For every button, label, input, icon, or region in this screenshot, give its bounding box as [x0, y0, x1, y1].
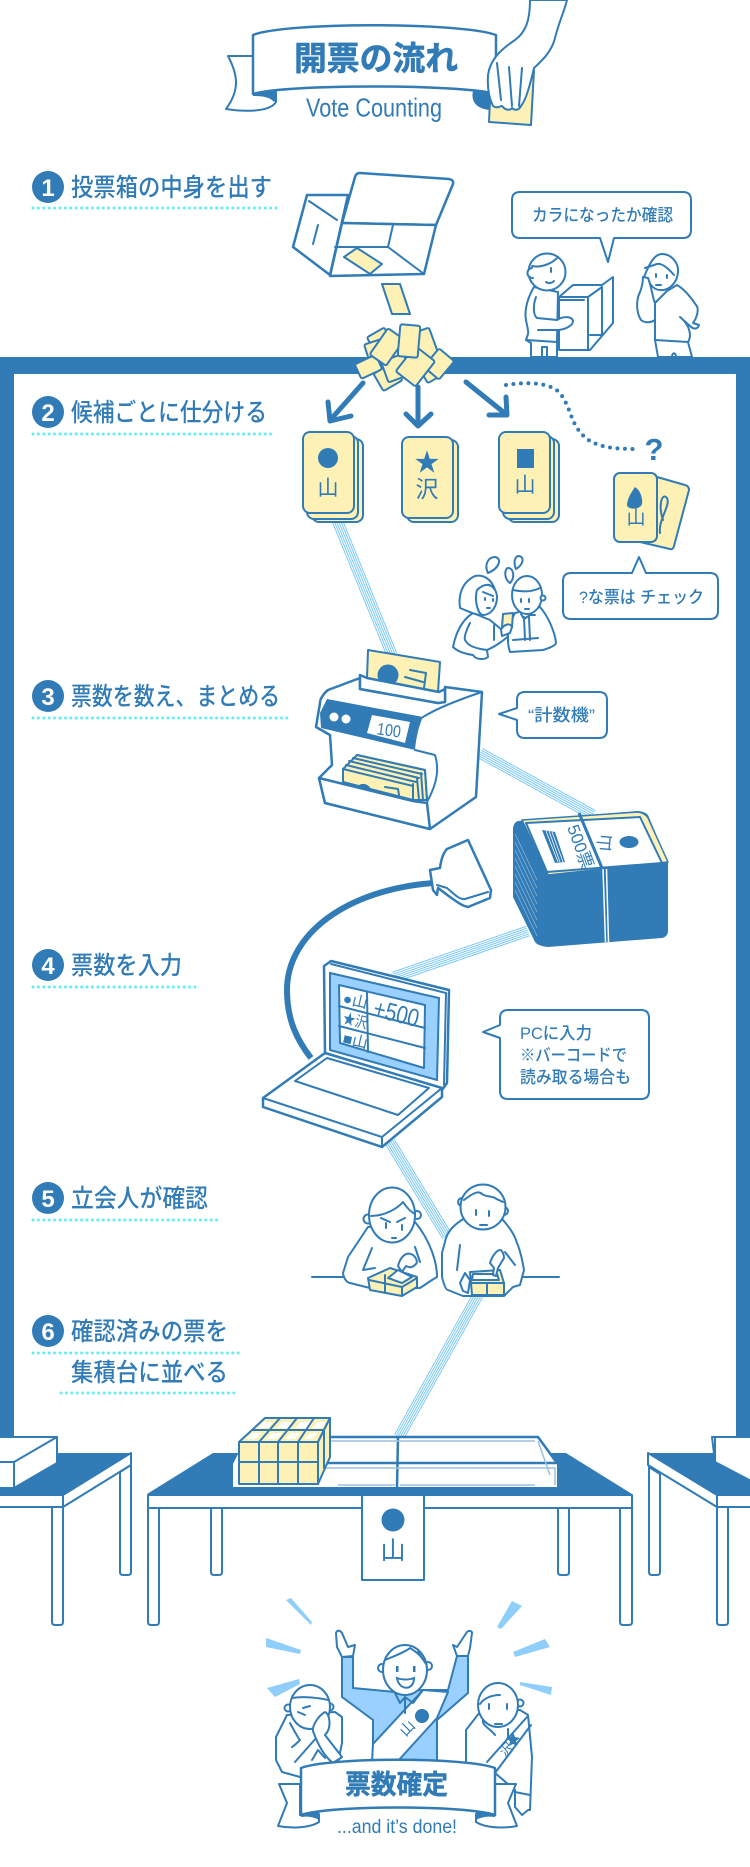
bubble: counting machine	[499, 692, 607, 738]
pile: circle candidate: 山	[318, 477, 338, 500]
tray front	[319, 778, 430, 829]
right witness	[442, 1218, 524, 1296]
counting machine	[316, 650, 482, 829]
step 5 heading	[32, 1182, 218, 1220]
laptop: ★沢	[341, 1010, 369, 1033]
ballot pile	[355, 324, 454, 391]
table legs	[148, 1508, 632, 1625]
step 1 heading: 1	[41, 175, 55, 202]
flow beams	[337, 520, 593, 1437]
winning candidate: 山	[396, 1717, 419, 1740]
step 1 heading	[32, 171, 280, 208]
heading text: 票数を数え、まとめる	[71, 683, 280, 711]
step 5 heading: 5	[41, 1186, 55, 1213]
barcode reader with cable	[287, 840, 491, 1058]
shirt with raised arms	[342, 1656, 468, 1762]
heading text line 1: 確認済みの票を	[71, 1318, 228, 1346]
counted ballots	[343, 755, 427, 800]
bubble: empty check	[512, 192, 691, 262]
bundle of 500 ballots	[513, 811, 668, 947]
doubtful ballots: 山	[626, 507, 646, 529]
number badge 3	[32, 680, 64, 712]
step 2 heading: 2	[41, 400, 55, 427]
banner fold shading	[301, 1812, 495, 1820]
ballot card in hand	[489, 70, 534, 125]
banner text: 票数確定	[345, 1770, 448, 1800]
pile: star candidate	[402, 437, 458, 522]
icon: opened ballot box	[293, 173, 453, 314]
bubble: check doubtful ballots: ?な票は チェック	[579, 588, 704, 607]
step 6 heading	[32, 1315, 239, 1393]
count label: 500票	[563, 822, 597, 871]
person thinking	[655, 285, 699, 357]
bundle left	[368, 1268, 417, 1296]
title banner	[226, 0, 567, 125]
step 3 heading	[32, 680, 287, 718]
pile: square candidate	[499, 432, 559, 522]
heading text: 候補ごとに仕分ける	[71, 399, 267, 427]
bundle of 500 ballots: 山	[595, 834, 615, 852]
people checking the box	[525, 254, 699, 357]
machine body	[316, 678, 482, 829]
banner tails	[278, 1784, 319, 1827]
barcode	[542, 830, 565, 863]
heading text: 立会人が確認	[71, 1185, 208, 1213]
pile: square candidate: 山	[514, 474, 536, 497]
keyboard base	[263, 1053, 442, 1147]
sash	[372, 1690, 448, 1762]
screen	[330, 973, 439, 1080]
left table	[0, 1437, 131, 1625]
bundle right	[470, 1270, 504, 1295]
ballot in hand	[502, 613, 513, 627]
pile: star candidate: ★	[414, 449, 440, 477]
winning candidate	[336, 1631, 472, 1762]
counter display	[367, 715, 410, 743]
pile: circle candidate	[303, 432, 363, 522]
candidate sign	[362, 1495, 424, 1580]
stack lines	[515, 834, 537, 936]
bubble: empty check: カラになったか確認	[532, 206, 673, 225]
falling ballot	[382, 284, 410, 314]
empty box held	[559, 277, 613, 350]
doubtful ballots	[614, 473, 689, 549]
banner left tail	[226, 56, 276, 111]
head	[378, 1664, 386, 1672]
sub text: ...and it’s done!	[337, 1817, 457, 1838]
paper band	[579, 813, 602, 868]
left witness	[343, 1222, 437, 1288]
number badge 1	[32, 171, 64, 203]
disappointed candidate right: 沢	[496, 1739, 516, 1759]
man	[508, 607, 556, 652]
top face	[522, 812, 668, 875]
ballot bundles on table	[239, 1418, 330, 1442]
dotted path to doubtful ballots	[506, 383, 638, 449]
heading text line 2: 集積台に並べる	[71, 1359, 228, 1387]
clear acrylic box	[233, 1437, 557, 1487]
subtitle: Vote Counting	[306, 93, 442, 123]
two people discussing	[453, 556, 556, 659]
main tally table	[147, 1418, 632, 1625]
collar	[395, 1690, 423, 1713]
result banner	[278, 1760, 517, 1838]
ballot in box	[344, 248, 382, 274]
hand	[488, 0, 567, 110]
hands	[336, 1631, 355, 1657]
bubble: enter into PC: ※バーコードで	[520, 1046, 627, 1065]
step 2 heading	[32, 396, 274, 434]
question mark: ?	[645, 432, 663, 467]
ballot being fed	[367, 650, 440, 692]
bubble: check doubtful ballots	[563, 557, 718, 619]
stack sides	[513, 811, 668, 947]
heading text: 投票箱の中身を出す	[71, 174, 272, 202]
screen table	[339, 985, 425, 1068]
title text: 開票の流れ	[294, 40, 458, 77]
bubble: enter into PC: PCに入力	[520, 1024, 592, 1043]
lid	[324, 961, 449, 1090]
banner right tail	[472, 91, 492, 110]
witnesses checking bundles	[312, 1184, 559, 1296]
bubble: enter into PC	[483, 1010, 649, 1099]
control panel	[320, 699, 423, 750]
neighbouring box	[0, 1437, 57, 1488]
laptop: ■山	[341, 1030, 369, 1053]
number badge 5	[32, 1182, 64, 1214]
step 6 heading: 6	[41, 1319, 55, 1346]
neighbouring box	[712, 1437, 750, 1483]
table text: ●山	[341, 990, 369, 1013]
person holding box	[525, 287, 558, 357]
number badge 4	[32, 949, 64, 981]
right table	[648, 1437, 750, 1625]
disappointed candidate left	[276, 1685, 342, 1777]
woman	[453, 613, 512, 659]
step 4 heading: 4	[41, 953, 55, 980]
step 3 heading: 3	[41, 684, 55, 711]
pile: star candidate: 沢	[416, 476, 438, 502]
bubble: counting machine: “計数機”	[528, 706, 595, 725]
banner body	[301, 1760, 495, 1815]
laptop	[263, 961, 449, 1147]
counting machine: 100	[376, 719, 402, 742]
heading text: 票数を入力	[71, 952, 182, 980]
banner body	[253, 25, 496, 94]
bubble: enter into PC: 読み取る場合も	[520, 1068, 631, 1087]
arrows to piles	[328, 382, 507, 426]
laptop: +500	[371, 995, 422, 1033]
celebration rays	[266, 1598, 552, 1697]
number badge 6	[32, 1315, 64, 1347]
step 4 heading	[32, 949, 196, 987]
blue frame	[0, 357, 750, 1437]
number badge 2	[32, 396, 64, 428]
disappointed candidate right	[466, 1683, 532, 1815]
main tally table: 山	[380, 1537, 406, 1565]
